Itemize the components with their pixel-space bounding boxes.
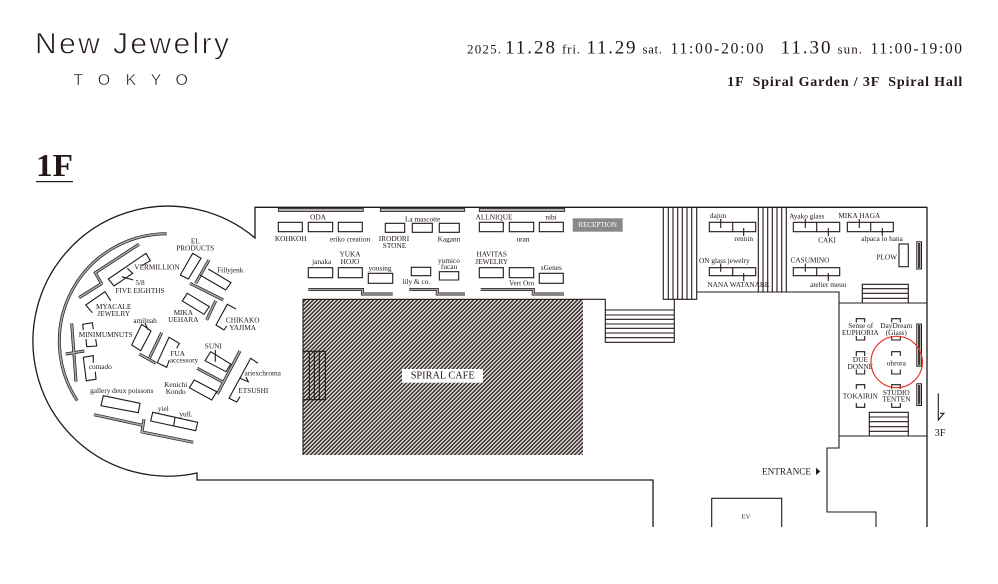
booths: bracket grid: TENTEN bbox=[882, 394, 911, 404]
booths: Ayako glass, CAKI, MIKA HAGA, alpaca to hana, CASUMINO, atelier meuu bbox=[789, 211, 904, 289]
stairs: plow side bbox=[862, 284, 908, 303]
entrance label and arrow: ENTRANCE bbox=[762, 466, 811, 476]
floor heading 1F: 1F bbox=[36, 147, 73, 183]
booths: Ayako glass, CAKI, MIKA HAGA, alpaca to hana, CASUMINO, atelier meuu: MIKA HAGA bbox=[838, 211, 881, 220]
booth: MYACALE JEWELRY: JEWELRY bbox=[97, 309, 131, 318]
booth: FUA accessory: accessory bbox=[170, 356, 199, 364]
title: New Jewelry Tokyo bbox=[35, 28, 229, 89]
booth: comado bbox=[83, 356, 112, 381]
booth: EL PRODUCTS bbox=[176, 236, 214, 279]
event dates and hours: 11:00-20:00 bbox=[670, 40, 764, 58]
booths: second row: Vert Oro bbox=[509, 278, 535, 288]
booths: bracket grid: EUPHORIA bbox=[842, 328, 879, 337]
arrow: to 3F bbox=[934, 393, 946, 439]
booths: VERMILLION, 5/8 FIVE EIGHTHS bbox=[108, 253, 180, 295]
booths: bracket grid: DUE bbox=[853, 355, 868, 364]
booths: bracket grid: Sense of bbox=[848, 321, 874, 330]
booths: Ayako glass, CAKI, MIKA HAGA, alpaca to hana, CASUMINO, atelier meuu: CAKI bbox=[818, 236, 836, 244]
elevator: EV bbox=[742, 514, 751, 520]
booths: top row: eriko creation bbox=[330, 234, 371, 244]
booths: second row: janaka bbox=[311, 257, 332, 266]
booths: VERMILLION, 5/8 FIVE EIGHTHS: VERMILLION bbox=[134, 262, 180, 272]
booth: Fillyjenk bbox=[200, 266, 244, 290]
booths: bracket grid: TOKAIRIN bbox=[843, 392, 879, 400]
booths: Ayako glass, CAKI, MIKA HAGA, alpaca to hana, CASUMINO, atelier meuu: Ayako glass bbox=[789, 212, 824, 220]
booths: Ayako glass, CAKI, MIKA HAGA, alpaca to hana, CASUMINO, atelier meuu: alpaca to hana bbox=[861, 234, 904, 243]
booths: second row: HAVITAS bbox=[476, 250, 507, 258]
booths: ariexchroma, ETSUSHI: ETSUSHI bbox=[238, 386, 269, 395]
booth: CHIKAKO YAJIMA: CHIKAKO bbox=[226, 316, 260, 324]
booth: Kenichi Kondo: Kenichi bbox=[164, 380, 187, 389]
booths: top row: STONE bbox=[383, 241, 407, 250]
booths: yiel, yull. bbox=[151, 404, 198, 431]
booth: PLOW: PLOW bbox=[876, 252, 897, 262]
event dates and hours: sun. bbox=[838, 42, 862, 56]
booth: FUA accessory bbox=[157, 337, 199, 367]
booth: amilnah bbox=[132, 316, 157, 351]
booth: amilnah: amilnah bbox=[133, 316, 157, 325]
stairs: north-west bbox=[663, 207, 697, 299]
booth: gallery deux poissons: gallery deux poissons bbox=[90, 386, 153, 395]
event dates and hours bbox=[467, 38, 962, 58]
booth: MINIMUMNUTS bbox=[79, 323, 133, 347]
gray walls: stepped row bbox=[308, 290, 564, 294]
title: New Jewelry Tokyo: TOKYO bbox=[73, 72, 188, 89]
booths: dajun, rennin, ON glass jewelry, NANA WATANABE: dajun bbox=[710, 211, 726, 220]
booths: dajun, rennin, ON glass jewelry, NANA WATANABE: ON glass jewelry bbox=[699, 256, 750, 265]
event dates and hours: fri. bbox=[562, 42, 580, 56]
booths: second row: YUKA bbox=[339, 250, 361, 258]
booths: bracket grid: ohrora bbox=[887, 358, 907, 368]
cafe label: SPIRAL CAFE bbox=[411, 370, 475, 382]
booths: bracket grid: DayDream bbox=[880, 321, 913, 330]
booth: FUA accessory: FUA bbox=[170, 349, 186, 358]
booth: SUNI: SUNI bbox=[205, 342, 222, 350]
arrow: to 3F: 3F bbox=[934, 428, 946, 439]
booths: second row: JEWELRY bbox=[475, 257, 509, 266]
booths: second row: sGenes bbox=[541, 263, 562, 272]
highlight circle: ohrora bbox=[871, 336, 922, 388]
booths: top row: La mascotte bbox=[405, 214, 440, 224]
booths: top row: Kagann bbox=[438, 234, 461, 244]
booth: Kenichi Kondo bbox=[164, 380, 217, 400]
booths: second row bbox=[308, 250, 563, 288]
booth: MYACALE JEWELRY bbox=[86, 292, 132, 318]
booths: VERMILLION, 5/8 FIVE EIGHTHS: 5/8 bbox=[135, 278, 145, 287]
stairs: entrance hall bbox=[869, 412, 908, 436]
booths: second row: yumico bbox=[438, 256, 460, 265]
booth: MIKA UEHARA: UEHARA bbox=[168, 315, 199, 324]
panel: spiral cafe bbox=[303, 299, 583, 455]
booths: top row bbox=[275, 212, 563, 250]
booths: ariexchroma, ETSUSHI bbox=[229, 358, 282, 402]
booths: VERMILLION, 5/8 FIVE EIGHTHS: FIVE EIGHTHS bbox=[115, 286, 165, 295]
floor plan bbox=[33, 206, 946, 527]
event dates and hours: sat. bbox=[642, 42, 662, 56]
booths: second row: HOJO bbox=[341, 257, 359, 266]
booth: MYACALE JEWELRY: MYACALE bbox=[96, 302, 132, 311]
dark wall panels bbox=[917, 242, 922, 406]
booth: Kenichi Kondo: Kondo bbox=[166, 387, 186, 396]
booth: MINIMUMNUTS: MINIMUMNUTS bbox=[79, 330, 133, 339]
event dates and hours: 11.30 bbox=[780, 38, 830, 58]
booth: MIKA UEHARA bbox=[168, 293, 209, 324]
booths: top row: nibi bbox=[545, 212, 557, 222]
booths: second row: yousing bbox=[368, 264, 392, 272]
booths: top row: KOHKOH bbox=[275, 234, 307, 243]
booth: PLOW bbox=[876, 244, 908, 267]
elevator bbox=[712, 498, 782, 527]
booths: ariexchroma, ETSUSHI: ariexchroma bbox=[244, 368, 282, 378]
booths: yiel, yull.: yull. bbox=[179, 410, 193, 418]
title: New Jewelry Tokyo: New Jewelry bbox=[35, 28, 229, 60]
booth: CHIKAKO YAJIMA: YAJIMA bbox=[229, 323, 257, 332]
booths: Ayako glass, CAKI, MIKA HAGA, alpaca to hana, CASUMINO, atelier meuu: atelier meuu bbox=[810, 280, 847, 289]
booths: bracket grid: (Glass) bbox=[886, 328, 907, 337]
booths: dajun, rennin, ON glass jewelry, NANA WATANABE bbox=[699, 211, 770, 289]
cafe stairs bbox=[303, 351, 325, 400]
event dates and hours: 11.29 bbox=[586, 38, 636, 58]
booth: gallery deux poissons bbox=[90, 386, 153, 413]
booth: EL PRODUCTS: PRODUCTS bbox=[176, 244, 214, 252]
booths: top row: IRODORI bbox=[379, 234, 410, 243]
booths: second row: lily & co. bbox=[402, 277, 430, 286]
booths: top row: ALLNIQUE bbox=[476, 212, 513, 222]
venue line: 1F Spiral Garden / 3F Spiral Hall bbox=[727, 75, 962, 90]
booths: top row: uran bbox=[517, 234, 530, 244]
booth: SUNI bbox=[205, 342, 231, 372]
booths: bracket grid: STUDIO bbox=[883, 388, 910, 397]
booth: CHIKAKO YAJIMA bbox=[216, 304, 260, 332]
booth: comado: comado bbox=[89, 362, 112, 371]
gray walls: top row bbox=[278, 208, 565, 212]
booths: bracket grid bbox=[842, 319, 913, 407]
booths: top row: ODA bbox=[310, 212, 327, 222]
booths: bracket grid: DONNE bbox=[848, 362, 874, 371]
booth: EL PRODUCTS: EL bbox=[191, 236, 200, 246]
booths: dajun, rennin, ON glass jewelry, NANA WATANABE: rennin bbox=[734, 234, 753, 243]
event dates and hours: 11:00-19:00 bbox=[870, 40, 962, 58]
booths: dajun, rennin, ON glass jewelry, NANA WATANABE: NANA WATANABE bbox=[707, 280, 770, 289]
cafe label bbox=[402, 369, 483, 383]
event dates and hours: 2025. bbox=[467, 42, 501, 56]
booths: second row: fucau bbox=[441, 262, 457, 271]
booth: Fillyjenk: Fillyjenk bbox=[217, 266, 244, 274]
stairs: beside cafe bbox=[583, 299, 674, 342]
booths: yiel, yull.: yiel bbox=[158, 404, 169, 413]
booth: MIKA UEHARA: MIKA bbox=[174, 308, 194, 317]
reception bbox=[573, 218, 623, 232]
booths: Ayako glass, CAKI, MIKA HAGA, alpaca to hana, CASUMINO, atelier meuu: CASUMINO bbox=[791, 256, 829, 264]
reception: RECEPTION bbox=[578, 221, 617, 229]
circular hall walls bbox=[66, 244, 240, 442]
event dates and hours: 11.28 bbox=[505, 38, 555, 58]
outer walls bbox=[33, 206, 927, 527]
curved inner wall bbox=[59, 234, 167, 401]
stairs: north-centre bbox=[758, 207, 786, 292]
